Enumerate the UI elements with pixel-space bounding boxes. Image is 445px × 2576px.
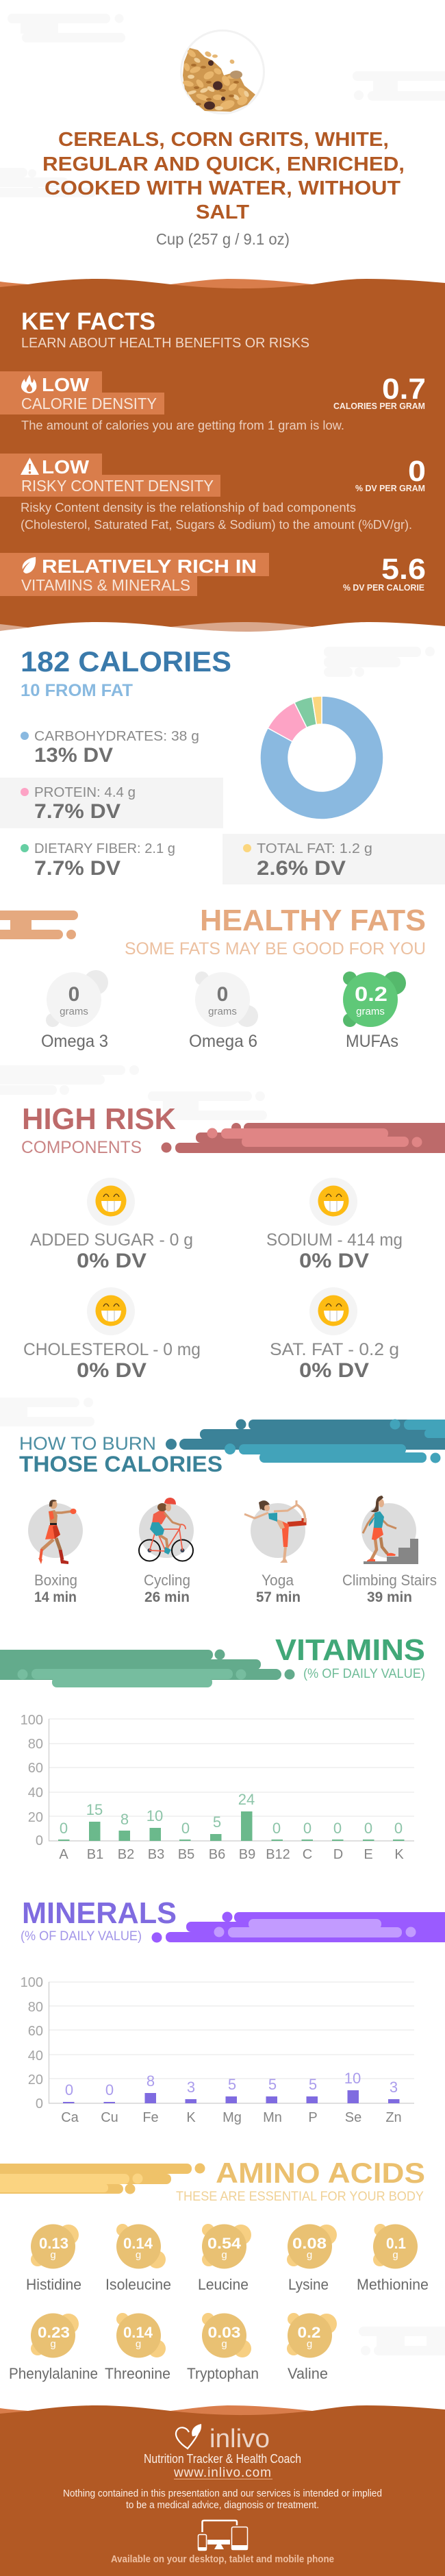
bar chart: vitamins: B12 <box>266 1847 290 1862</box>
highlight backgrounds <box>0 778 445 884</box>
item: added sugar: 0% DV <box>77 1250 147 1272</box>
bar chart: vitamins: 0 <box>303 1820 312 1837</box>
legend: protein: 7.7% DV <box>34 800 120 823</box>
bar chart: vitamins: 0 <box>364 1820 372 1837</box>
activity: yoga: 57 min <box>256 1589 301 1605</box>
item: added sugar <box>30 1178 193 1272</box>
panel: product header <box>0 14 445 248</box>
bar chart: vitamins: 100 <box>21 1713 43 1728</box>
bar chart: vitamins: 15 <box>86 1801 103 1818</box>
bar chart: vitamins: B9 <box>239 1847 255 1862</box>
bar chart: minerals: 5 <box>309 2076 317 2093</box>
amino: histidine: Histidine <box>26 2276 81 2293</box>
activity: cycling <box>139 1498 194 1605</box>
item: cholesterol <box>23 1287 201 1382</box>
subheading: (% OF DAILY VALUE) <box>21 1929 142 1944</box>
bar chart: vitamins: 0 <box>394 1820 403 1837</box>
amino: lysine <box>287 2224 337 2293</box>
amino: histidine: 0.13 <box>39 2235 68 2252</box>
subheading: SOME FATS MAY BE GOOD FOR YOU <box>125 939 426 958</box>
bar chart: vitamins: 0 <box>272 1820 281 1837</box>
bar chart: minerals: 10 <box>344 2070 361 2087</box>
food photo: granola in a ring <box>181 30 264 114</box>
amino: phenylalanine: g <box>50 2338 56 2350</box>
title: COOKED WITH WATER, WITHOUT <box>44 177 400 199</box>
decorative clouds between sections <box>0 1065 267 1120</box>
amino: tryptophan: 0.03 <box>208 2324 241 2341</box>
bar chart: minerals: Se <box>345 2110 361 2125</box>
fact: risky content density: % DV PER GRAM <box>355 484 425 493</box>
fact: vitamins and minerals: 5.6 <box>381 553 426 586</box>
stat: MUFAs: MUFAs <box>346 1032 398 1051</box>
fact: vitamins and minerals <box>0 553 426 596</box>
legend: carbohydrates: 13% DV <box>34 744 113 767</box>
fact: risky content density: RISKY CONTENT DENSITY <box>21 477 214 495</box>
icon: leaf <box>23 557 36 573</box>
loose flakes <box>204 50 236 64</box>
legend: carbohydrates: CARBOHYDRATES: 38 g <box>34 729 199 744</box>
decorative red cloud <box>162 1123 445 1153</box>
fact: risky content density: LOW <box>42 456 90 478</box>
legend: protein <box>21 785 136 823</box>
amino: histidine <box>26 2224 81 2293</box>
item: sodium <box>266 1178 403 1272</box>
amino: lysine: g <box>307 2249 312 2261</box>
bar chart: minerals: 3 <box>187 2079 195 2096</box>
icon: yoga pose <box>244 1500 305 1563</box>
amino: lysine: Lysine <box>288 2276 329 2293</box>
heading: VITAMINS <box>275 1633 425 1667</box>
stat: omega 3: Omega 3 <box>41 1032 108 1051</box>
amino: leucine: Leucine <box>198 2276 249 2293</box>
amino: tryptophan: Tryptophan <box>187 2365 259 2382</box>
stat: omega 6: Omega 6 <box>189 1032 257 1051</box>
bar chart: minerals: 0 <box>36 2096 43 2111</box>
bar chart: vitamins: B5 <box>178 1847 194 1862</box>
bar chart: minerals: 80 <box>28 2000 43 2015</box>
stat: omega 3: grams <box>60 1006 88 1017</box>
legend: total fat <box>243 841 372 880</box>
bar chart: vitamins: 0 <box>60 1820 68 1837</box>
decorative green cloud <box>0 1650 294 1687</box>
bar chart: minerals: 20 <box>28 2072 43 2088</box>
heading: AMINO ACIDS <box>216 2157 425 2189</box>
disclaimer <box>63 2488 382 2511</box>
website: www.inlivo.com <box>173 2466 271 2480</box>
amino: histidine: g <box>50 2249 56 2261</box>
legend: dietary fiber <box>21 841 175 880</box>
bar chart: minerals: Fe <box>142 2110 159 2125</box>
amino: threonine: g <box>136 2338 141 2350</box>
icon: grinning face <box>318 1295 349 1326</box>
bar chart: vitamins: K <box>394 1847 404 1862</box>
item: added sugar: ADDED SUGAR - 0 g <box>30 1230 193 1250</box>
bar chart: vitamins: 0 <box>36 1833 43 1848</box>
bar chart: minerals: 8 <box>147 2072 155 2090</box>
panel: vitamins <box>0 1633 425 1862</box>
panel: high risk components <box>21 1102 445 1382</box>
icon: heart with leaf <box>176 2424 201 2449</box>
stat: omega 3: 0 <box>68 983 79 1006</box>
panel: how to burn those calories <box>0 1398 445 1605</box>
activity: climbing stairs <box>342 1496 437 1605</box>
amino: leucine <box>198 2224 251 2293</box>
activity: boxing: Boxing <box>34 1572 77 1589</box>
amino: methionine: g <box>392 2249 398 2261</box>
legend: carbohydrates <box>21 729 199 767</box>
amino: valine <box>287 2313 337 2382</box>
fact: calorie density: CALORIE DENSITY <box>21 395 157 412</box>
heading <box>19 1433 222 1476</box>
fact: risky content density: (Cholesterol, Saturated Fat, Sugars & Sodium) to the amount (%DV/gr). <box>21 518 412 532</box>
amino: methionine: Methionine <box>357 2276 429 2293</box>
amino: tryptophan: g <box>221 2338 227 2350</box>
stat: MUFAs: grams <box>356 1006 385 1017</box>
amino: lysine: 0.08 <box>292 2235 327 2252</box>
heading: HEALTHY FATS <box>200 904 426 937</box>
item: sodium: 0% DV <box>299 1250 369 1272</box>
bar chart: vitamins: 24 <box>238 1791 255 1808</box>
subheading: (% OF DAILY VALUE) <box>303 1667 425 1681</box>
panel: calories <box>0 645 445 884</box>
heading: MINERALS <box>22 1896 177 1930</box>
activity: boxing: 14 min <box>34 1589 77 1605</box>
heading: 182 CALORIES <box>21 645 231 678</box>
bar chart: minerals: Cu <box>101 2110 118 2125</box>
fact: calorie density: CALORIES PER GRAM <box>333 401 425 411</box>
panel: footer <box>0 2405 445 2576</box>
bar chart: vitamins: C <box>303 1847 312 1862</box>
decorative yellow cloud <box>0 2164 205 2194</box>
amino: isoleucine: g <box>136 2249 141 2261</box>
bar chart: minerals: 0 <box>65 2081 73 2098</box>
activity: climbing stairs: Climbing Stairs <box>342 1572 437 1589</box>
bar chart: minerals: 5 <box>228 2076 236 2093</box>
icon: warning triangle <box>21 458 39 475</box>
bar chart: minerals: Ca <box>61 2110 79 2125</box>
bar chart: minerals: 3 <box>390 2079 398 2096</box>
stat: omega 6: grams <box>208 1006 237 1017</box>
bar chart: vitamins: 60 <box>28 1761 43 1776</box>
subheading: LEARN ABOUT HEALTH BENEFITS OR RISKS <box>21 336 309 351</box>
decorative orange cloud <box>0 911 78 939</box>
heading: HIGH RISK <box>22 1102 176 1136</box>
icon: grinning face <box>96 1185 126 1217</box>
bar chart: minerals <box>21 1975 414 2125</box>
legend: protein: PROTEIN: 4.4 g <box>34 785 136 800</box>
stat: MUFAs: 0.2 <box>355 983 387 1006</box>
bar chart: vitamins: 40 <box>28 1785 43 1800</box>
item: saturated fat <box>270 1287 399 1382</box>
bar chart: minerals: 60 <box>28 2024 43 2039</box>
logo: inlivo: inlivo <box>209 2425 270 2453</box>
heading: HOW TO BURN <box>19 1433 156 1454</box>
activity: climbing stairs: 39 min <box>367 1589 412 1605</box>
background wave <box>0 279 445 632</box>
title: SALT <box>196 201 249 223</box>
raisins <box>204 60 225 110</box>
fact: risky content density <box>0 454 426 532</box>
amino: leucine: g <box>221 2249 227 2261</box>
amino: valine: Valine <box>288 2365 328 2382</box>
heading: THOSE CALORIES <box>19 1452 222 1476</box>
bar chart: vitamins: 80 <box>28 1737 43 1752</box>
fact: vitamins and minerals: % DV PER CALORIE <box>343 583 424 593</box>
icon: desktop, tablet and phone <box>198 2521 248 2551</box>
title: REGULAR AND QUICK, ENRICHED, <box>42 153 405 175</box>
icon: cyclist <box>139 1498 193 1561</box>
bar chart: minerals: Mg <box>222 2110 242 2125</box>
panel: amino acids <box>0 2157 445 2382</box>
amino: isoleucine: Isoleucine <box>105 2276 171 2293</box>
heading: KEY FACTS <box>21 308 155 335</box>
icon: flame <box>21 375 36 393</box>
fact: calorie density: 0.7 <box>382 373 426 406</box>
subheading: 10 FROM FAT <box>21 681 133 700</box>
amino: methionine <box>357 2224 429 2293</box>
bar chart: vitamins <box>21 1713 414 1862</box>
subheading: THESE ARE ESSENTIAL FOR YOUR BODY <box>176 2189 424 2204</box>
decorative purple cloud <box>152 1911 445 1943</box>
amino: isoleucine: 0.14 <box>123 2235 153 2252</box>
amino: threonine: 0.14 <box>123 2324 153 2341</box>
bar chart: vitamins: B1 <box>87 1847 103 1862</box>
bar chart: minerals: Mn <box>263 2110 282 2125</box>
fact: risky content density: Risky Content density is the relationship of bad components <box>21 501 356 515</box>
activity: cycling: 26 min <box>144 1589 190 1605</box>
panel: minerals <box>21 1896 445 2125</box>
serving size: Cup (257 g / 9.1 oz) <box>156 230 290 248</box>
bar chart: vitamins: B6 <box>209 1847 225 1862</box>
stat: omega 6: 0 <box>217 983 228 1006</box>
amino: threonine: Threonine <box>105 2365 170 2382</box>
bar chart: vitamins: 5 <box>213 1813 221 1831</box>
bar chart: vitamins: A <box>59 1847 68 1862</box>
bar chart: minerals: K <box>186 2110 196 2125</box>
legend: total fat: TOTAL FAT: 1.2 g <box>257 841 372 856</box>
bar chart: minerals: 40 <box>28 2048 43 2064</box>
icon: grinning face <box>96 1295 126 1326</box>
bar chart: vitamins: E <box>364 1847 373 1862</box>
logo: inlivo <box>176 2424 270 2453</box>
icon: grinning face <box>318 1185 349 1217</box>
decorative grey cloud <box>359 2327 445 2355</box>
bar chart: minerals: 100 <box>21 1975 43 1990</box>
fact: risky content density: 0 <box>408 455 426 488</box>
stat: omega 3 <box>41 970 108 1051</box>
bar chart: vitamins: 8 <box>120 1811 129 1828</box>
bar chart: minerals: 0 <box>105 2081 114 2098</box>
amino: leucine: 0.54 <box>207 2235 242 2252</box>
item: saturated fat: 0% DV <box>299 1359 369 1382</box>
decorative cloud <box>324 647 435 677</box>
decorative cloud behind title <box>0 168 96 197</box>
panel: key facts <box>0 279 445 632</box>
stat: omega 6 <box>189 971 258 1051</box>
availability note: Available on your desktop, tablet and mobile phone <box>111 2553 334 2565</box>
background wave <box>0 2405 445 2576</box>
amino: isoleucine <box>105 2224 171 2293</box>
stat: MUFAs <box>343 971 406 1051</box>
title <box>42 129 405 223</box>
decorative cloud right <box>353 71 445 101</box>
disclaimer: Nothing contained in this presentation and our services is intended or implied <box>63 2488 382 2499</box>
bar chart: vitamins: 10 <box>147 1807 163 1824</box>
legend: dietary fiber: 7.7% DV <box>34 857 120 880</box>
activity: cycling: Cycling <box>144 1572 190 1589</box>
fact: calorie density: The amount of calories you are getting from 1 gram is low. <box>21 419 344 432</box>
amino: valine: g <box>307 2338 312 2350</box>
amino: phenylalanine <box>9 2313 98 2382</box>
amino: threonine <box>105 2313 170 2382</box>
bar chart: vitamins: 20 <box>28 1810 43 1825</box>
icon: boxer <box>38 1500 77 1564</box>
bar chart: minerals: P <box>308 2110 318 2125</box>
item: cholesterol: 0% DV <box>77 1359 147 1382</box>
amino: valine: 0.2 <box>297 2324 320 2341</box>
amino: phenylalanine: 0.23 <box>38 2324 70 2341</box>
tagline: Nutrition Tracker & Health Coach <box>144 2451 301 2466</box>
item: cholesterol: CHOLESTEROL - 0 mg <box>23 1340 201 1359</box>
fact: vitamins and minerals: RELATIVELY RICH IN <box>42 556 257 577</box>
bar chart: vitamins: 0 <box>181 1820 190 1837</box>
activity: yoga <box>244 1500 305 1605</box>
bar chart: vitamins: B2 <box>118 1847 134 1862</box>
decorative teal cloud <box>166 1420 445 1463</box>
fact: vitamins and minerals: VITAMINS & MINERALS <box>21 576 190 594</box>
bar chart: vitamins: 0 <box>333 1820 342 1837</box>
activity: yoga: Yoga <box>262 1572 294 1589</box>
item: saturated fat: SAT. FAT - 0.2 g <box>270 1340 399 1359</box>
disclaimer: to be a medical advice, diagnosis or treatment. <box>126 2499 319 2511</box>
fact: calorie density: LOW <box>42 374 90 395</box>
legend: total fat: 2.6% DV <box>257 857 346 880</box>
fact: calorie density <box>0 371 426 432</box>
decorative cloud top left <box>8 14 125 42</box>
activity: boxing <box>28 1500 83 1605</box>
bar chart: minerals: 5 <box>268 2076 277 2093</box>
item: sodium: SODIUM - 414 mg <box>266 1230 403 1250</box>
bar chart: vitamins: B3 <box>148 1847 164 1862</box>
subheading: COMPONENTS <box>21 1138 142 1157</box>
amino: tryptophan <box>187 2313 259 2382</box>
amino: methionine: 0.1 <box>386 2235 406 2252</box>
bar chart: minerals: Zn <box>385 2110 402 2125</box>
bar chart: vitamins: D <box>333 1847 343 1862</box>
legend: dietary fiber: DIETARY FIBER: 2.1 g <box>34 841 175 856</box>
panel: healthy fats <box>0 904 426 1051</box>
icon: stairs and climber <box>363 1496 418 1564</box>
decorative grey cloud <box>0 1398 94 1426</box>
amino: phenylalanine: Phenylalanine <box>9 2365 98 2382</box>
title: CEREALS, CORN GRITS, WHITE, <box>58 129 389 151</box>
donut chart <box>260 696 383 819</box>
